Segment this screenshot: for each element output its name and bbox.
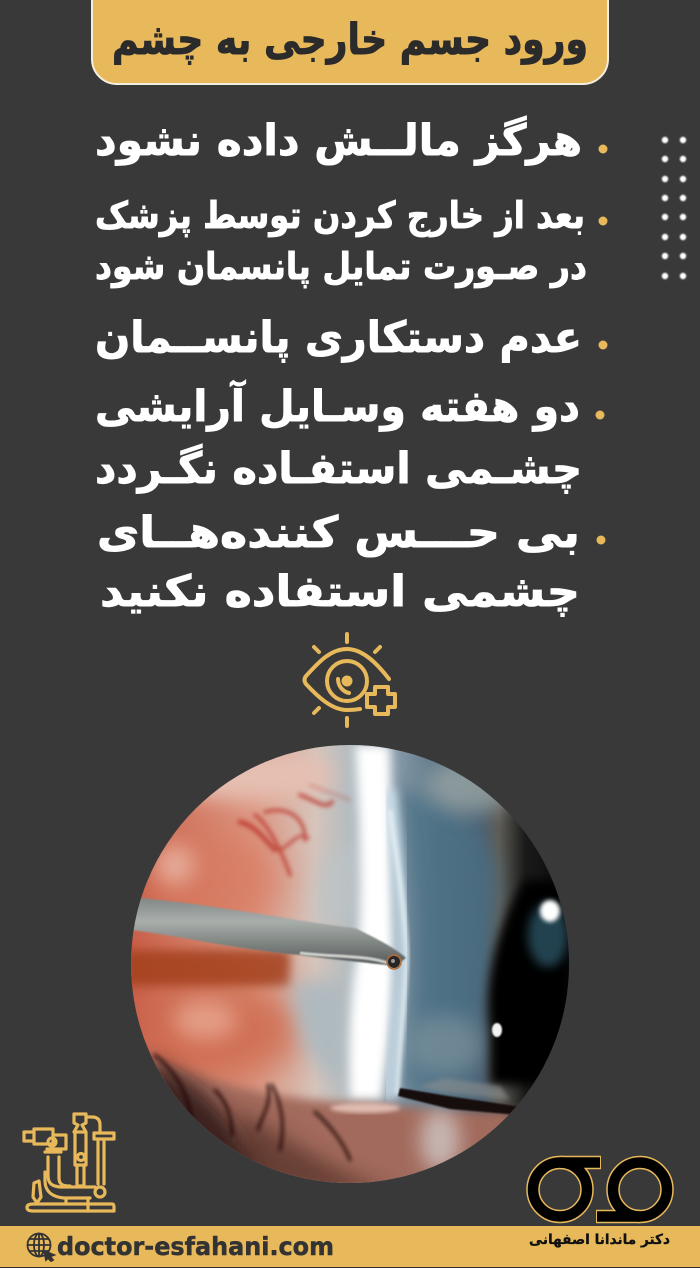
pupil	[488, 880, 569, 1085]
logo mark	[533, 1162, 667, 1216]
advice 2: bandage after removal: بعد از خارج کردن توسط پزشک	[95, 194, 585, 237]
advice 5: no eye anesthetics: چشمی استفاده نکنید	[100, 567, 580, 617]
slit light beam	[349, 745, 394, 1100]
footer rule	[0, 1267, 700, 1268]
advice 2: bandage after removal: در صـورت تمایل پانسمان شود	[95, 245, 587, 288]
footer band	[0, 1226, 700, 1267]
blood vessels	[240, 785, 350, 875]
advice 5: no eye anesthetics	[97, 508, 606, 617]
icon: globe with cursor	[28, 1233, 54, 1261]
advice 2: bandage after removal	[95, 194, 608, 288]
title banner: ورود جسم خارجی به چشم	[112, 15, 588, 65]
doctor name: دکتر ماندانا اصفهانی	[529, 1232, 670, 1248]
advice 4: no eye makeup for two weeks: چشـمی استفـاده نگـردد	[95, 443, 582, 494]
foreign body	[388, 956, 400, 968]
needle	[131, 897, 406, 966]
advice 3: do not touch the bandage: عدم دستکاری پانســمان	[95, 313, 582, 363]
advice 5: no eye anesthetics: بی حـــس کننده‌هــای	[97, 508, 580, 558]
corneal blue	[395, 790, 500, 1090]
redness	[145, 830, 285, 930]
decorative dot grid	[662, 137, 686, 279]
logo	[533, 1162, 667, 1216]
icon: slit lamp	[24, 1114, 114, 1211]
eyelashes	[155, 1055, 350, 1160]
title banner	[92, 0, 608, 84]
advice 1: do not rub: هرگز مالــش داده نشود	[95, 115, 582, 166]
pale sclera	[290, 981, 350, 1085]
advice 4: no eye makeup for two weeks	[95, 380, 604, 494]
advice list	[95, 115, 608, 617]
reflections	[540, 900, 560, 922]
website url: doctor-esfahani.com	[57, 1232, 334, 1261]
advice 4: no eye makeup for two weeks: دو هفته وسـایل آرایشی	[95, 380, 580, 432]
logo outline	[533, 1162, 667, 1216]
lower lid	[150, 1051, 512, 1183]
photo: foreign body removal from cornea	[120, 745, 569, 1200]
icon: eye with plus	[304, 634, 395, 726]
